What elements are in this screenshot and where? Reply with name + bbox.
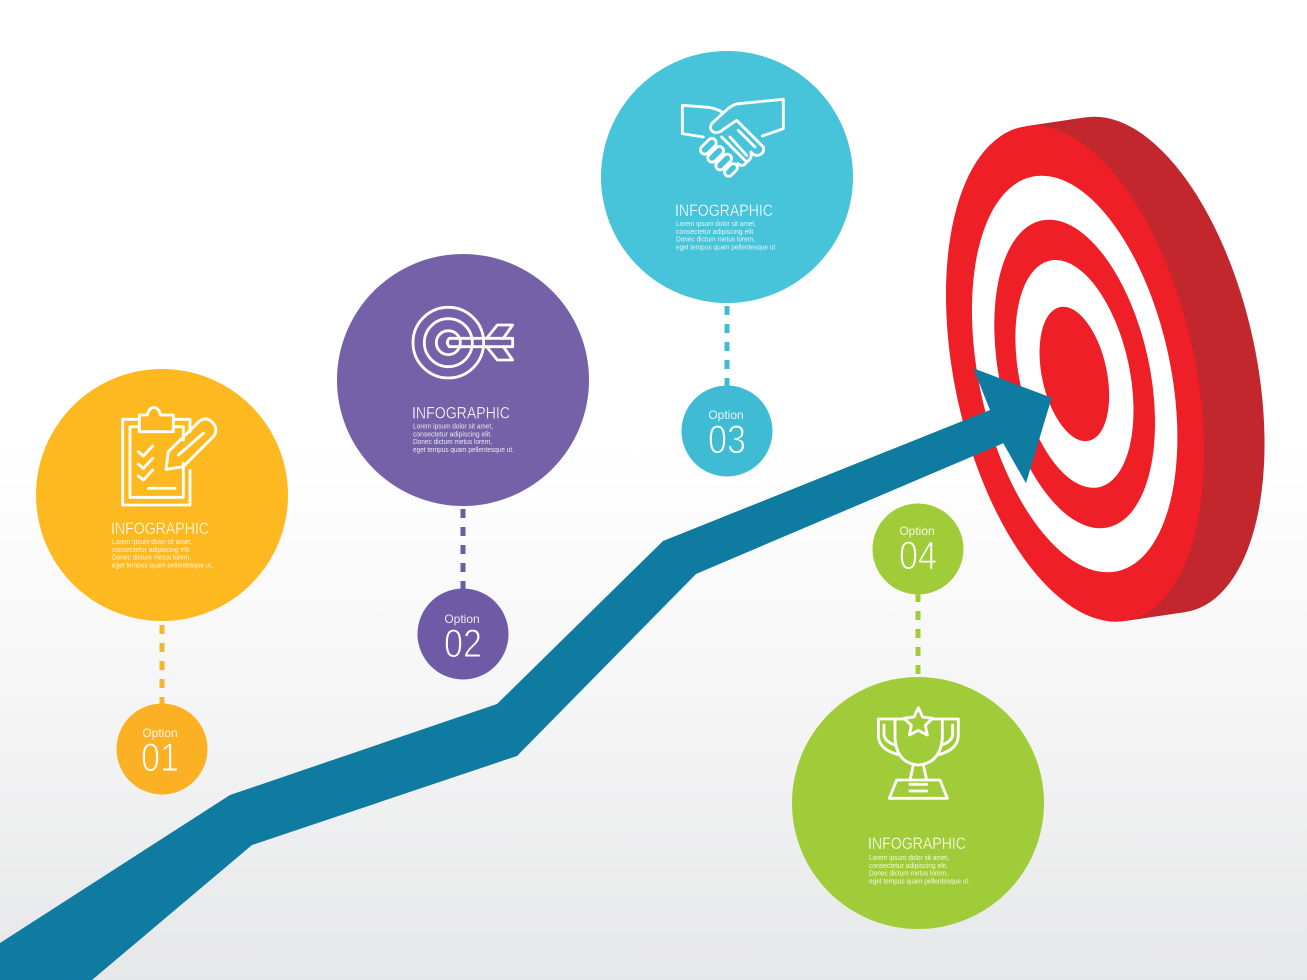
text block 01 (111, 520, 213, 570)
panel: option 01 (36, 369, 288, 794)
badge 02: 02 (444, 622, 482, 666)
connector 04 (916, 593, 920, 678)
text block 01: INFOGRAPHIC (111, 520, 209, 538)
circle 04 (792, 677, 1044, 929)
text block 04: eget tempus quam pellentesque ut. (869, 876, 970, 886)
icon: trophy (878, 708, 958, 798)
text block 02: Lorem ipsum dolor sit amet, (413, 422, 493, 430)
text block 02 (412, 404, 514, 454)
connector 03 (724, 306, 730, 388)
text block 01: consectetur adipiscing elit. (112, 545, 191, 554)
badge 01: 01 (141, 736, 179, 780)
text block 01: Lorem ipsum dolor sit amet, (112, 537, 192, 546)
badge 02: Option (444, 612, 480, 626)
text block 03: Donec dictum metus lorem, (676, 234, 755, 244)
icon: target with arrow (413, 307, 513, 378)
text block 03: Lorem ipsum dolor sit amet, (676, 219, 756, 228)
circle 03 (601, 51, 853, 303)
badge 02 (418, 588, 508, 680)
text block 03: consectetur adipiscing elit. (676, 227, 755, 236)
text block 03: eget tempus quam pellentesque ut. (676, 242, 777, 252)
connector 02 (460, 509, 466, 591)
badge 03 (682, 386, 772, 476)
target rings (904, 102, 1246, 646)
connector 01 (160, 625, 164, 706)
text block 02: eget tempus quam pellentesque ut. (413, 445, 514, 454)
badge 01: Option (142, 726, 178, 740)
text block 04: Donec dictum metus lorem, (869, 868, 948, 878)
panel: option 03 (601, 51, 853, 476)
target board (904, 93, 1306, 646)
icon: handshake (682, 99, 783, 178)
badge 03: 03 (708, 418, 746, 462)
badge 04: 04 (899, 534, 937, 578)
text block 02: Donec dictum metus lorem, (413, 437, 492, 446)
icon: clipboard and pencil (123, 407, 216, 505)
panel: option 04 (792, 504, 1044, 929)
circle 02 (337, 254, 589, 506)
text block 03 (675, 202, 777, 252)
text block 03: INFOGRAPHIC (675, 202, 773, 220)
panel: option 02 (337, 254, 589, 680)
text block 02: consectetur adipiscing elit. (413, 430, 492, 438)
text block 01: eget tempus quam pellentesque ut. (112, 560, 213, 570)
growth arrow (0, 368, 1052, 980)
badge 04 (872, 504, 964, 594)
text block 04 (868, 835, 970, 886)
badge 01 (116, 704, 208, 794)
text block 02: INFOGRAPHIC (412, 404, 510, 422)
circle 01 (36, 369, 288, 621)
badge 04: Option (899, 524, 935, 538)
text block 04: INFOGRAPHIC (868, 835, 966, 853)
text block 04: Lorem ipsum dolor sit amet, (869, 853, 949, 862)
target side wall (965, 93, 1306, 637)
text block 01: Donec dictum metus lorem, (112, 552, 191, 562)
badge 03: Option (708, 408, 744, 422)
text block 04: consectetur adipiscing elit. (869, 861, 948, 870)
